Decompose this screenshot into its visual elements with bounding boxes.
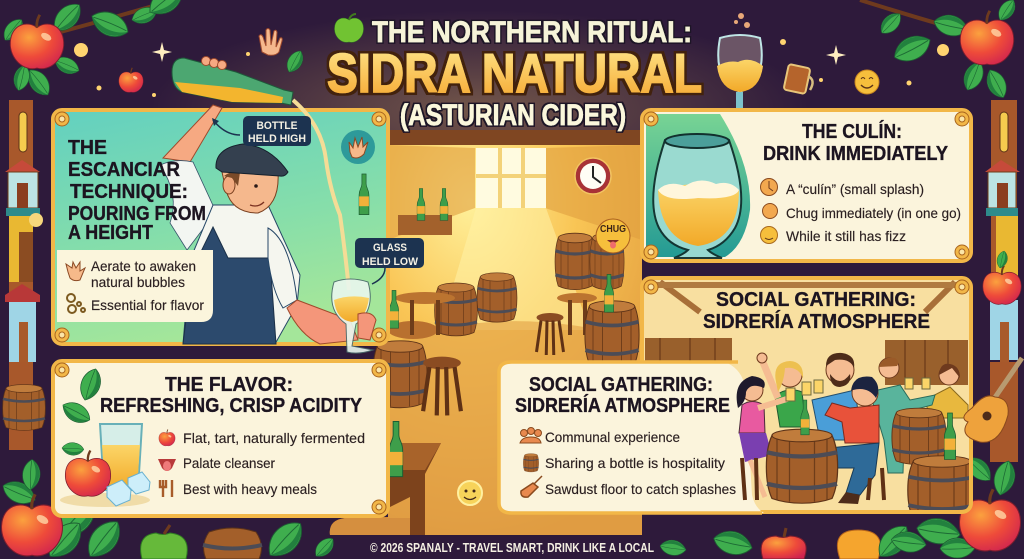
sleeve right xyxy=(268,228,297,308)
panel: the culin xyxy=(642,110,971,261)
bullets: escanciar: natural bubbles xyxy=(91,274,185,290)
heading: escanciar: POURING FROM xyxy=(68,202,206,225)
woman green xyxy=(757,353,806,427)
callout: bottle held high: HELD HIGH xyxy=(248,133,306,145)
info box xyxy=(57,250,213,322)
forearm xyxy=(287,300,358,344)
pillar left xyxy=(3,100,45,450)
shared barrel xyxy=(766,429,838,503)
title line 1: THE NORTHERN RITUAL: xyxy=(372,16,692,49)
title line 2: SIDRA NATURAL xyxy=(327,42,702,104)
man blue xyxy=(812,353,862,440)
pourer illustration xyxy=(160,56,376,353)
bottom fruits row xyxy=(79,517,928,559)
bullets: flavor: Flat, tart, naturally fermented xyxy=(183,430,365,446)
bullets: culin: A “culín” (small splash) xyxy=(786,181,924,197)
red apple xyxy=(761,536,806,559)
icon: bubbles bullet xyxy=(67,294,85,313)
bullets: escanciar: Aerate to awaken xyxy=(91,258,196,274)
icon: chug badge: CHUG xyxy=(600,224,626,235)
bullet icons: social xyxy=(520,428,542,497)
woman pink xyxy=(737,376,790,500)
bullets: social: Sawdust floor to catch splashes xyxy=(545,481,736,497)
callout: glass held low: GLASS xyxy=(373,242,407,254)
hand and bottle xyxy=(202,72,222,100)
rear barrel xyxy=(892,408,946,465)
top-right apple branch xyxy=(860,0,1020,100)
glass xyxy=(332,279,373,353)
title line 3: (ASTURIAN CIDER) xyxy=(400,99,626,132)
bullets: culin: While it still has fizz xyxy=(786,228,906,244)
heading: flavor: REFRESHING, CRISP ACIDITY xyxy=(100,394,362,417)
flat cap xyxy=(216,144,288,176)
glasses xyxy=(786,378,930,401)
front barrel xyxy=(907,455,969,510)
bullets: escanciar xyxy=(91,258,204,313)
heading: escanciar xyxy=(68,136,206,244)
icon: smiley xyxy=(855,70,879,94)
icon: hand top xyxy=(259,28,282,55)
callout: glass held low xyxy=(355,238,424,284)
decor leaf and sparkles xyxy=(74,39,949,97)
central tavern scene xyxy=(330,130,642,535)
large cider glass xyxy=(653,134,741,258)
callout: bottle held high xyxy=(212,116,311,146)
small red apple xyxy=(119,68,143,92)
icon: mug xyxy=(784,64,813,94)
icon: hand bullet xyxy=(66,262,85,281)
heading: scene: SIDRERÍA ATMOSPHERE xyxy=(703,310,930,333)
callout: glass held low: HELD LOW xyxy=(362,256,419,268)
heading: flavor: THE FLAVOR: xyxy=(165,373,293,396)
bullets: flavor: Palate cleanser xyxy=(183,455,275,471)
icon: clock xyxy=(575,158,611,194)
heading: flavor xyxy=(100,373,362,417)
pillar right xyxy=(983,100,1021,462)
title icon: green apple xyxy=(334,14,364,42)
man teal xyxy=(872,358,935,473)
icon: top wine glass xyxy=(717,13,763,109)
bottom-left corner fruit xyxy=(0,458,104,559)
barrel bottom xyxy=(204,528,261,559)
man red xyxy=(825,377,884,504)
icon: guitar xyxy=(964,358,1022,442)
bullets: escanciar: Essential for flavor xyxy=(91,297,204,313)
bullet icons: culin xyxy=(760,178,778,244)
heading: culin: THE CULÍN: xyxy=(802,120,902,143)
panel: social gathering xyxy=(499,362,764,513)
heading: scene xyxy=(703,288,930,333)
icon: hand in panel xyxy=(341,130,375,164)
icon: smiley on floor xyxy=(458,481,482,505)
bullets: social: Sharing a bottle is hospitality xyxy=(545,455,725,471)
apron xyxy=(183,227,276,344)
bullets: flavor xyxy=(183,430,365,497)
heading: social: SOCIAL GATHERING: xyxy=(529,374,713,396)
bullets: social: Communal experience xyxy=(545,429,680,445)
bullets: culin xyxy=(786,181,961,244)
icon: small bottle xyxy=(359,174,369,215)
panel: sidreria scene xyxy=(642,278,971,512)
callout: bottle held high: BOTTLE xyxy=(256,120,298,132)
stream xyxy=(293,100,349,290)
bullet icons: flavor xyxy=(158,429,176,497)
heading: escanciar: THE xyxy=(68,136,107,159)
head xyxy=(222,172,278,213)
top-left apple branch xyxy=(0,0,190,99)
heading: culin xyxy=(763,120,949,165)
glow behind title xyxy=(150,10,810,210)
heading: scene: SOCIAL GATHERING: xyxy=(716,288,916,311)
shirt and torso xyxy=(183,205,300,344)
orange xyxy=(837,530,880,559)
heading: escanciar: ESCANCIAR xyxy=(68,158,180,181)
bullets: social xyxy=(545,429,736,497)
arm raised xyxy=(163,105,222,162)
heading: escanciar: TECHNIQUE: xyxy=(70,180,188,203)
bullets: flavor: Best with heavy meals xyxy=(183,481,317,497)
green apple xyxy=(141,533,187,559)
heading: social xyxy=(515,374,730,417)
flavor illustration xyxy=(59,366,150,507)
bottom-right corner fruit xyxy=(914,452,1022,559)
woman yellow xyxy=(925,364,968,418)
heading: escanciar: A HEIGHT xyxy=(68,221,153,244)
panel: the flavor xyxy=(53,361,388,516)
footer credit: © 2026 SPANALY - TRAVEL SMART, DRINK LIKE A LOCAL xyxy=(370,541,654,555)
icon: chug badge xyxy=(596,219,630,253)
panel: escanciar technique xyxy=(53,56,424,353)
bullets: culin: Chug immediately (in one go) xyxy=(786,205,961,221)
people toasting xyxy=(736,352,969,510)
title block xyxy=(327,14,702,132)
heading: social: SIDRERÍA ATMOSPHERE xyxy=(515,394,730,417)
heading: culin: DRINK IMMEDIATELY xyxy=(763,143,949,165)
sleeve raised xyxy=(160,161,216,250)
